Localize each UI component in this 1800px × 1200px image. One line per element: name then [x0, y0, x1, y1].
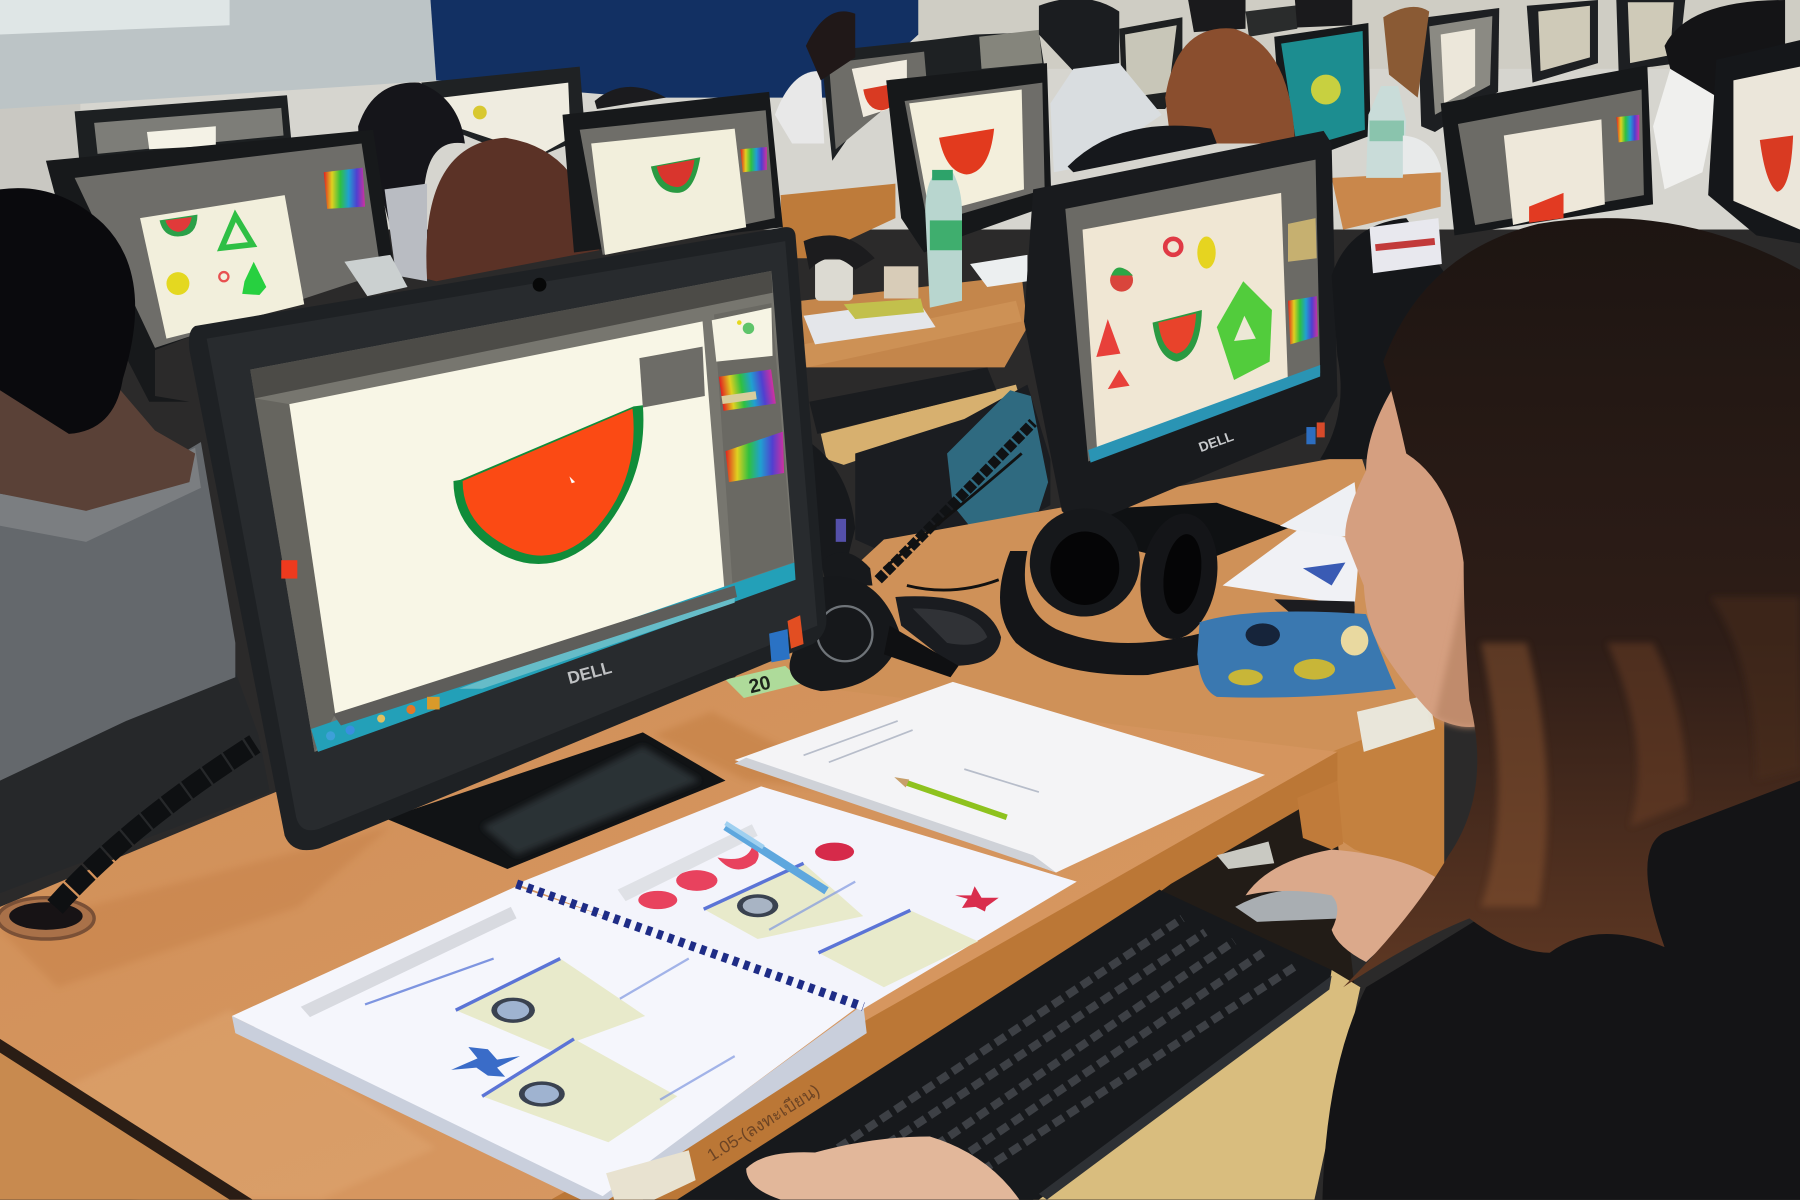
blue X icon [451, 1047, 520, 1077]
center desk surface [735, 453, 1444, 884]
colour picker [726, 432, 784, 482]
triangles [1096, 319, 1120, 357]
main monitor stand [386, 732, 726, 869]
right spectrum [1288, 296, 1318, 344]
hair [0, 188, 135, 434]
projector screen [0, 0, 441, 109]
green number tag [726, 666, 804, 698]
monitor: rear right center [886, 63, 1052, 253]
monitor: main right [1024, 131, 1337, 528]
page text lines [620, 882, 855, 1100]
ring [1165, 239, 1181, 255]
right wall [918, 0, 1800, 69]
front desk surface [0, 677, 1337, 1200]
cursor [569, 476, 575, 483]
upper coiled cable [878, 422, 1033, 580]
swatches [719, 369, 776, 411]
taskbar [1088, 365, 1320, 463]
speaker behind main monitor [804, 442, 855, 574]
neck [0, 390, 195, 511]
notebook thickness [232, 1004, 867, 1200]
fill swatch [281, 560, 297, 579]
desk clutter rear [804, 235, 1027, 344]
chair [0, 672, 270, 893]
page 1 header [301, 907, 517, 1017]
bezel [189, 227, 827, 850]
task icons [326, 697, 440, 740]
taskbar [311, 563, 796, 752]
computer mouse [1235, 890, 1347, 922]
brand text: DELL [1197, 429, 1236, 455]
mid desks [781, 172, 1441, 563]
keyboard [677, 890, 1332, 1200]
mid keyboard [809, 367, 996, 434]
lower-left desk [0, 1045, 241, 1200]
watermelon flesh [463, 409, 634, 556]
ID card [1370, 218, 1442, 273]
watermelon small [1153, 310, 1202, 362]
face [1345, 367, 1527, 727]
tool column [255, 398, 335, 752]
navy curtain [430, 0, 918, 98]
pink shapes [638, 891, 677, 909]
thin cables [626, 453, 1022, 735]
green number tag: 20 [747, 672, 773, 698]
desk grain shading [0, 712, 872, 1200]
back row monitors [75, 0, 1685, 172]
right artboard [1083, 193, 1288, 456]
monitor: rear left [46, 130, 408, 402]
back students [358, 0, 1785, 281]
right panels [714, 303, 793, 583]
desk label [606, 1080, 823, 1200]
hair highlights [1481, 597, 1800, 907]
yellow circle [1197, 236, 1216, 269]
spiral binding [517, 884, 863, 1007]
grey shirt [0, 442, 235, 781]
red badge [788, 615, 804, 649]
left headphones [790, 552, 1001, 691]
Intel badge [769, 629, 790, 662]
page 2 header [618, 824, 758, 901]
front hand [746, 1136, 1019, 1200]
lower left coiled cable [0, 744, 255, 939]
monitor: back right [1441, 65, 1653, 235]
right page [517, 786, 1077, 1010]
desk label: 1.05-(ลงทะเบียน) [703, 1080, 823, 1165]
monitor: far right [1708, 40, 1800, 243]
green pencil [894, 777, 1007, 817]
front-left seated student [0, 188, 270, 893]
green pentagon [1217, 281, 1272, 380]
main monitor [189, 227, 827, 850]
far right bottle [1366, 86, 1442, 178]
right monitor stand [1062, 503, 1288, 565]
black headset behind woman [1320, 218, 1446, 459]
right desk papers [1223, 482, 1360, 615]
background wall [0, 0, 1800, 230]
keyboard tray [735, 790, 1355, 1200]
artboard [289, 321, 726, 714]
front desk edge [551, 752, 1337, 1200]
rear wall left patch [0, 103, 80, 247]
control panel [639, 347, 705, 408]
hair [1343, 218, 1800, 987]
screen [250, 271, 794, 752]
center headphones [1000, 496, 1225, 675]
black blouse [1322, 769, 1800, 1200]
woman at right [1246, 218, 1800, 1200]
blank paper [735, 682, 1265, 872]
webcam [533, 278, 546, 292]
figure panels [456, 959, 645, 1050]
water bottle [925, 170, 962, 308]
split circle [1110, 269, 1133, 292]
monitor: rear center [562, 92, 783, 255]
Dell logo: DELL [565, 657, 614, 688]
disc icons [491, 998, 535, 1023]
blue pen [726, 823, 827, 891]
hand on mouse [1246, 849, 1437, 962]
spiral notebook [232, 786, 1077, 1200]
menu bar [250, 271, 773, 398]
left page [232, 886, 861, 1196]
cartoon pouch [1197, 611, 1396, 698]
watermelon rind [453, 405, 643, 564]
